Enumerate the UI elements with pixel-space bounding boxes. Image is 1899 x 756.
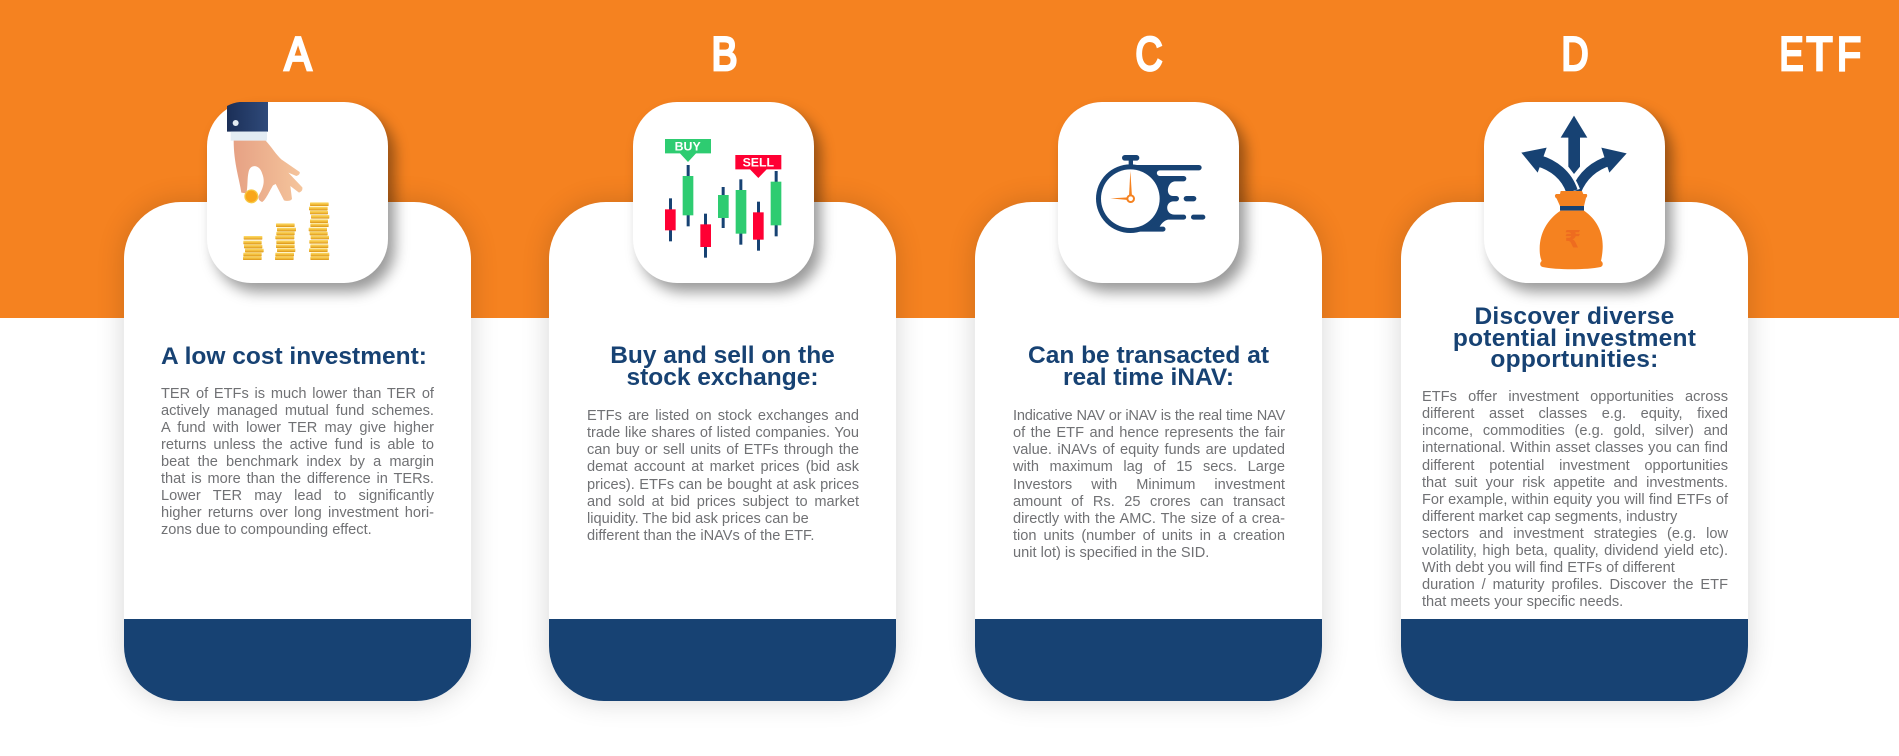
heading C [1028,342,1269,391]
text block D: that suit your risk appetite and investments. [1422,475,1728,491]
text block B: prices). ETFs can be bought at ask prices [587,477,859,493]
text block D [1422,389,1728,610]
heading C: real time iNAV: [1063,364,1234,391]
text block D: different asset classes e.g. equity, fixed [1422,406,1728,422]
heading D: opportunities: [1490,346,1659,373]
text block B: liquidity. The bid ask prices can be [587,511,809,527]
text block A: beat the benchmark index by a margin [161,454,434,470]
text block B: different than the iNAVs of the ETF. [587,528,814,544]
column letter C: C [1136,27,1162,80]
heading D [1453,303,1696,373]
footer band B [549,619,896,701]
icon: money bag with three arrows [1484,102,1665,283]
orange header band [0,0,1899,318]
text block D: With debt you will find ETFs of different [1422,560,1675,576]
heading A: A low cost investment: [161,343,427,370]
text block A: returns unless the active fund is able to [161,437,434,453]
column letter A: A [284,27,312,80]
text block D: different potential investment opportunities [1422,458,1728,474]
text block D: For example, within equity you will find ETFs of [1422,492,1728,508]
text block C: of the ETF and hence represents the fair [1013,425,1285,441]
text block D: different market cap segments, industry [1422,509,1677,525]
text block D: international. Within asset classes you can find [1422,440,1728,456]
heading D: potential investment [1453,325,1696,352]
label ETF [1780,27,1861,80]
text block D: duration / maturity profiles. Discover the ETF [1422,577,1728,593]
text block C: unit lot) is specified in the SID. [1013,545,1209,561]
text block C: tion units (number of units in a creation [1013,528,1285,544]
text block D: income, commodities (e.g. gold, silver) and [1422,423,1728,439]
text block D: volatility, high beta, quality, dividend yield etc). [1422,543,1728,559]
text block B: ETFs are listed on stock exchanges and [587,408,859,424]
text block B [587,408,859,544]
text block A: actively managed mutual fund schemes. [161,403,434,419]
footer band C [975,619,1322,701]
heading D: Discover diverse [1474,303,1675,330]
text block B: can buy or sell units of ETFs through the [587,442,859,458]
text block D: that meets your specific needs. [1422,594,1623,610]
heading B: stock exchange: [626,364,818,391]
heading C: Can be transacted at [1028,342,1269,369]
text block C: directly with the AMC. The size of a crea- [1013,511,1285,527]
icon: candlestick chart with buy and sell flags: SELL [743,156,775,170]
panel: low cost investment [124,202,471,701]
text block A: A fund with lower TER may give higher [161,420,434,436]
footer band D [1401,619,1748,701]
text block D: ETFs offer investment opportunities across [1422,389,1728,405]
text block B: demat account at market prices (bid ask [587,459,859,475]
icon: candlestick chart with buy and sell flags: BUY [675,140,701,154]
column letter D: D [1562,27,1588,80]
text block C: Investors with Minimum investment [1013,477,1285,493]
panel: diverse investment opportunities [1401,202,1748,701]
text block B: trade like shares of listed companies. You [587,425,859,441]
icon: speeding stopwatch [1058,102,1239,283]
label ETF: E [1780,27,1804,80]
text block B: and sold at bid prices subject to market [587,494,859,510]
text block A: that is more than the difference in TERs. [161,471,434,487]
icon: money bag with three arrows: ₹ [1564,225,1581,253]
label ETF: F [1837,27,1861,80]
text block C: value. iNAVs of equity funds are updated [1013,442,1285,458]
text block A: Lower TER may lead to significantly [161,488,434,504]
heading B [610,342,835,391]
text block C: amount of Rs. 25 crores can transact [1013,494,1285,510]
icon: hand placing coins on stacks [207,102,388,283]
text block C [1013,408,1286,561]
text block C: with maximum lag of 15 secs. Large [1013,459,1285,475]
column letter B: B [712,27,738,80]
footer band A [124,619,471,701]
heading B: Buy and sell on the [610,342,835,369]
text block A: zons due to compounding effect. [161,522,372,538]
text block C: Indicative NAV or iNAV is the real time NAV [1013,408,1285,424]
text block A: TER of ETFs is much lower than TER of [161,386,434,402]
text block A: higher returns over long investment hori- [161,505,434,521]
label ETF: T [1806,27,1832,80]
text block D: sectors and investment strategies (e.g. low [1422,526,1728,542]
icon: candlestick chart with buy and sell flags [633,102,814,283]
panel: transacted at real time iNAV [975,202,1322,701]
text block A [161,386,434,538]
panel: buy and sell on the stock exchange [549,202,896,701]
